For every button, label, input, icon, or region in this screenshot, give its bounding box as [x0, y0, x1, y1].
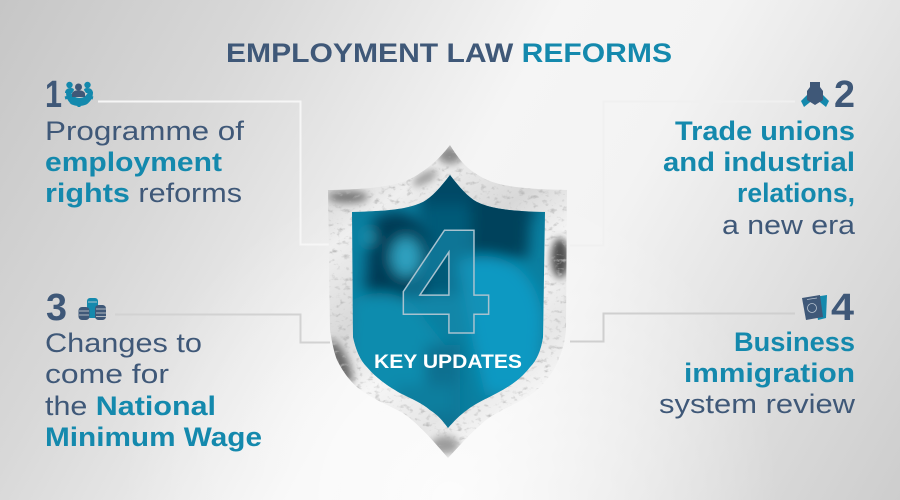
number 4: 4: [831, 287, 854, 329]
panel: item 3: Minimum Wage: [45, 422, 262, 452]
panel: item 4: [659, 287, 856, 419]
icon: team gear: [65, 82, 93, 107]
panel: item 3: come for: [45, 359, 169, 389]
icon: coin stacks: [78, 298, 106, 320]
icon: joined hands: [801, 82, 829, 107]
shield: silver frame: [320, 140, 575, 465]
shield: teal photo: [352, 175, 545, 428]
text: trade unions and industrial relations: Trade unions: [675, 116, 855, 146]
panel: item 2: a new era: [722, 210, 856, 240]
text: programme of employment rights reforms: Programme of: [45, 116, 245, 146]
panel: item 3: [45, 287, 262, 452]
panel: item 2: and industrial: [663, 147, 855, 177]
panel: item 1: employment: [45, 147, 222, 177]
panel: item 1: rights reforms: [45, 178, 242, 208]
connector: item 2: [570, 102, 795, 246]
panel: item 4: immigration: [684, 358, 855, 388]
panel: item 2: relations,: [737, 178, 855, 208]
connector: item 3: [115, 314, 330, 342]
number 2: 2: [834, 74, 855, 116]
panel: item 3: the National: [45, 391, 216, 421]
connector: item 1: [98, 102, 330, 244]
large numeral 4: 4: [397, 203, 495, 367]
title: EMPLOYMENT LAW REFORMS: [226, 38, 672, 68]
panel: item 2: [663, 74, 856, 240]
shield badge: [320, 140, 575, 465]
key updates label: KEY UPDATES: [374, 352, 522, 373]
number 3: 3: [46, 287, 67, 329]
connector: item 4: [570, 314, 795, 342]
text: business immigration system review: Business: [734, 327, 855, 357]
number 1: 1: [45, 74, 62, 116]
icon: passports: [802, 295, 827, 320]
panel: item 1: [45, 74, 245, 208]
text: changes to come for the national minimum wage: Changes to: [45, 328, 202, 358]
panel: item 4: system review: [659, 389, 856, 419]
